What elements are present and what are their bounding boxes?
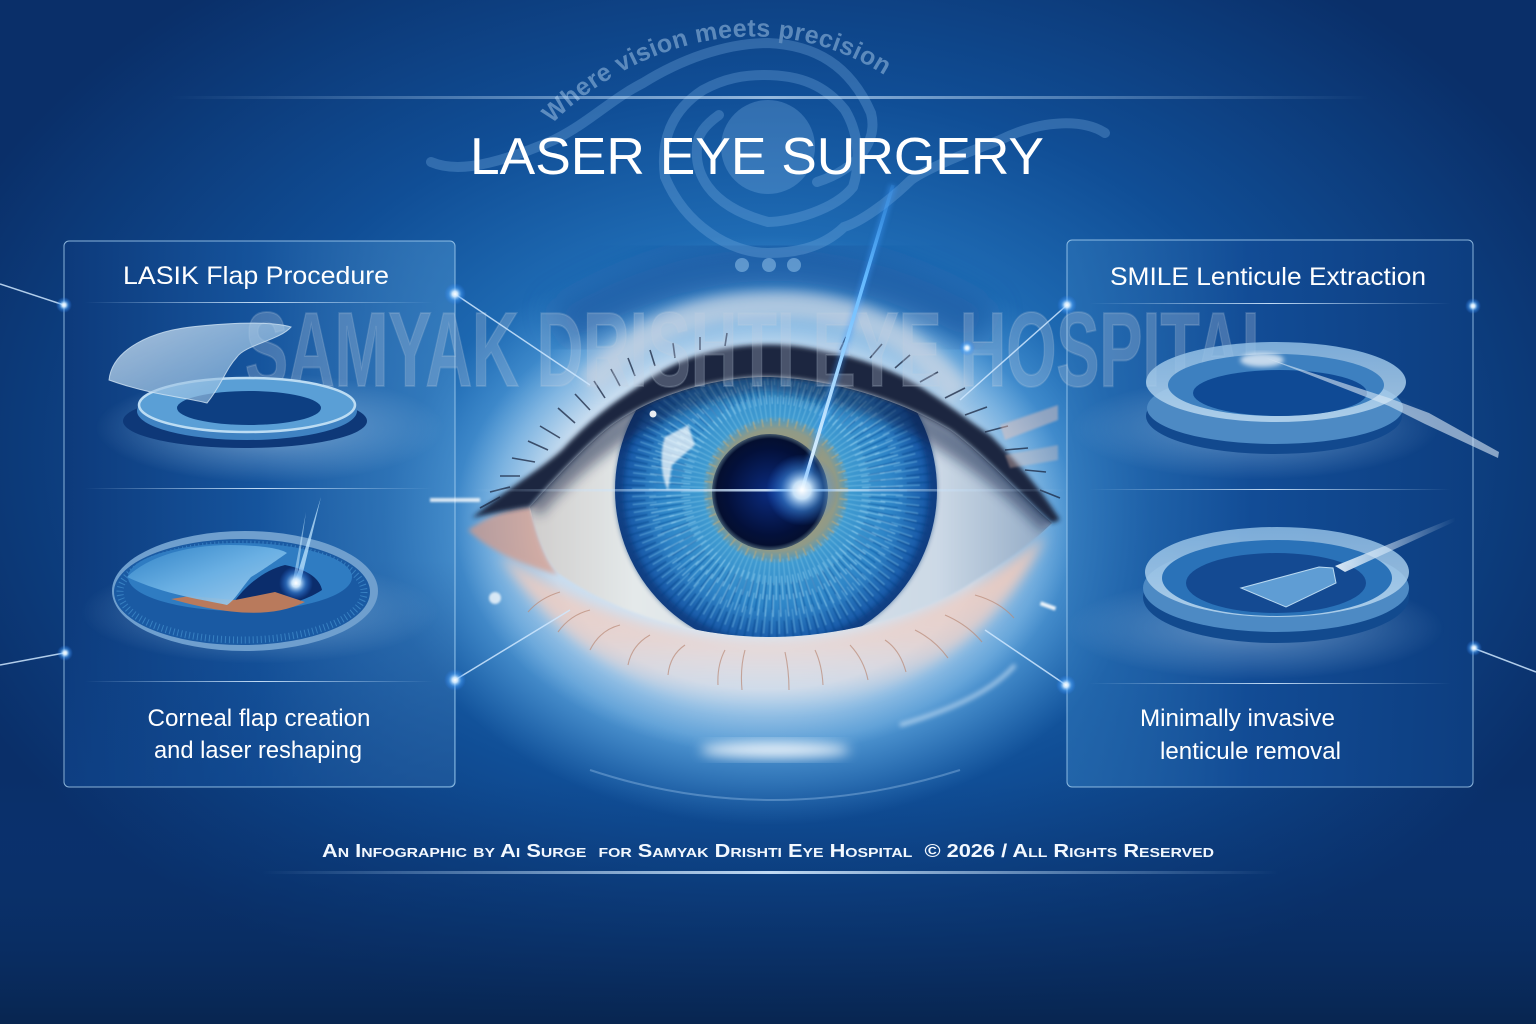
LASIK caption: Corneal flap creation	[148, 705, 370, 732]
SMILE heading: SMILE Lenticule Extraction	[1110, 263, 1426, 291]
panel: LASIK	[80, 262, 445, 764]
title: LASER EYE SURGERY	[470, 128, 1044, 186]
icon: LASIK flap lifted	[95, 323, 445, 483]
panel backgrounds	[64, 240, 1473, 787]
eye: sclera	[530, 377, 1052, 637]
eye: lower lid skin	[500, 535, 1045, 710]
eye: lower lashes	[528, 592, 1014, 690]
icon: SMILE spatula	[1065, 517, 1456, 680]
SMILE caption: lenticule removal	[1160, 738, 1341, 765]
connector lines and nodes	[0, 283, 1536, 695]
eye: upper lashes	[480, 333, 1060, 508]
bottom glow arcs	[590, 665, 1015, 800]
eye: side light streaks	[430, 405, 1058, 611]
LASIK caption	[148, 705, 370, 764]
eye: iris and pupil	[530, 377, 1052, 637]
laser beam	[470, 185, 1070, 526]
footer credit: An Infographic by Ai Surge for Samyak Drishti Eye Hospital © 2026 / All Rights Reserved	[322, 841, 1214, 861]
LASIK heading: LASIK Flap Procedure	[123, 262, 389, 290]
central eye	[430, 305, 1060, 710]
eye: caruncle	[468, 507, 558, 575]
SMILE caption: Minimally invasive	[1140, 705, 1335, 732]
LASIK caption: and laser reshaping	[154, 737, 362, 764]
eye: brow crease	[590, 305, 960, 395]
icon: SMILE lenticule disc	[1070, 342, 1499, 480]
top divider	[170, 96, 1370, 99]
central eye glow	[383, 235, 1153, 825]
SMILE caption	[1140, 705, 1341, 765]
eye: upper lash band	[472, 345, 1060, 523]
watermark logo: eye and tagline	[426, 20, 1110, 272]
icon: LASIK laser reshaping	[80, 497, 440, 664]
eye: iris highlight	[662, 425, 695, 490]
watermark logo: eye and tagline: Where vision meets precision	[540, 20, 889, 121]
panel: SMILE	[1065, 263, 1499, 765]
